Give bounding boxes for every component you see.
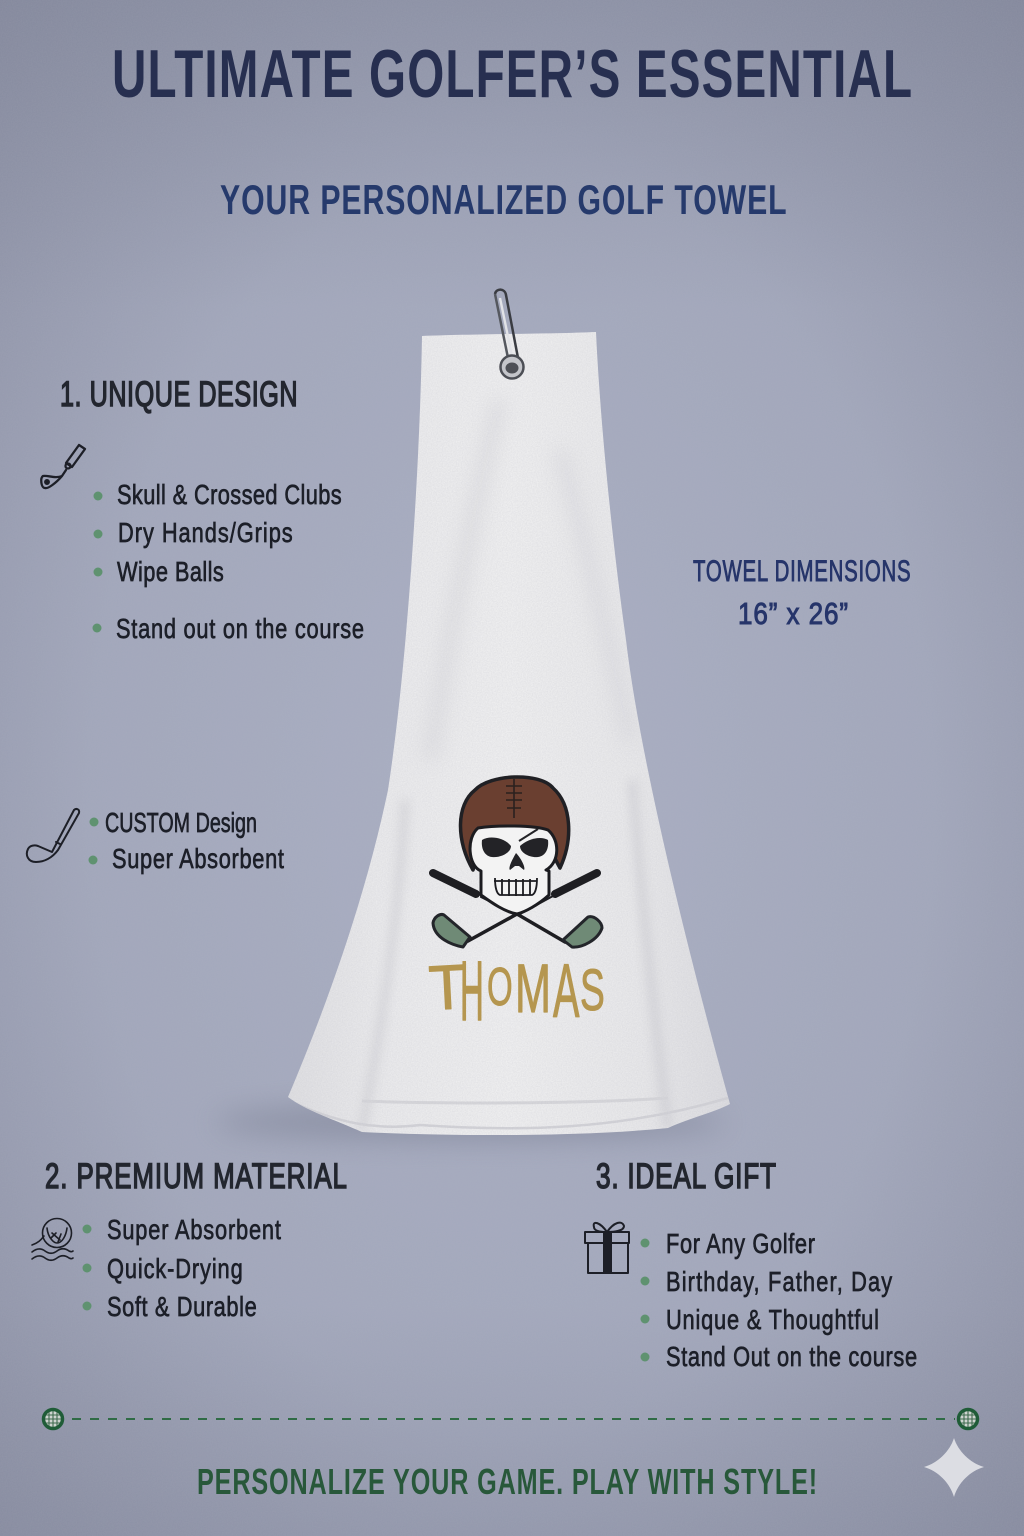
teeth <box>494 878 537 896</box>
bullet list: Super Absorbent <box>107 1214 281 1246</box>
embroidered name: M <box>515 951 551 1028</box>
icon: ball over water <box>32 1218 73 1260</box>
towel dimensions: TOWEL DIMENSIONS <box>693 555 911 588</box>
bullet list <box>82 1214 281 1323</box>
icon: golf iron <box>27 809 79 862</box>
bullet list: CUSTOM Design <box>105 807 257 838</box>
bullet list: Soft & Durable <box>107 1291 257 1323</box>
bullet list: Quick-Drying <box>107 1253 243 1285</box>
bullet list <box>640 1228 917 1373</box>
panel: ideal gift <box>585 1156 917 1373</box>
skull <box>470 826 557 914</box>
heading: 3. IDEAL GIFT <box>596 1156 776 1196</box>
embroidered name: T <box>427 952 467 1024</box>
towel dimensions <box>693 555 911 632</box>
embroidery: skull with football helmet and crossed clubs <box>427 777 605 1038</box>
bullet list: Super Absorbent <box>112 843 284 875</box>
icon: golf club <box>41 445 85 488</box>
dashed divider with golf balls <box>44 1410 978 1428</box>
icon: carabiner hook <box>495 290 524 378</box>
bullet list: Stand out on the course <box>116 613 364 645</box>
bullet list: Unique & Thoughtful <box>666 1304 879 1336</box>
bullet list: Birthday, Father, Day <box>666 1266 893 1298</box>
eyes <box>482 838 511 857</box>
footer tagline: PERSONALIZE YOUR GAME. PLAY WITH STYLE! <box>197 1462 817 1502</box>
embroidered name: H <box>460 944 484 1038</box>
panel: custom design <box>27 807 284 875</box>
crossed club shafts <box>433 873 597 942</box>
towel dimensions: 16” x 26” <box>738 597 848 632</box>
bullet list: Wipe Balls <box>117 556 224 588</box>
icon: gift box <box>585 1223 629 1273</box>
bullet list: For Any Golfer <box>666 1228 815 1260</box>
club heads <box>433 914 470 947</box>
helmet <box>460 777 569 870</box>
helmet laces <box>506 779 522 818</box>
embroidered name: S <box>580 957 605 1023</box>
subtitle: YOUR PERSONALIZED GOLF TOWEL <box>220 176 787 223</box>
panel: unique design <box>41 375 364 645</box>
bullet list <box>92 479 364 645</box>
embroidered name <box>427 944 605 1038</box>
bullet list: Stand Out on the course <box>666 1341 917 1373</box>
embroidered name: A <box>553 948 580 1033</box>
panel: premium material <box>32 1156 347 1323</box>
embroidered name: O <box>487 957 513 1017</box>
heading: 1. UNIQUE DESIGN <box>60 375 298 414</box>
towel with hook and embroidery <box>215 290 740 1140</box>
bullet list <box>88 807 284 875</box>
title: ULTIMATE GOLFER’S ESSENTIAL <box>112 37 912 112</box>
icon: sparkle <box>924 1438 984 1497</box>
nose <box>509 853 524 870</box>
heading: 2. PREMIUM MATERIAL <box>45 1156 347 1196</box>
bullet list: Dry Hands/Grips <box>118 517 293 549</box>
bullet list: Skull & Crossed Clubs <box>117 479 342 511</box>
